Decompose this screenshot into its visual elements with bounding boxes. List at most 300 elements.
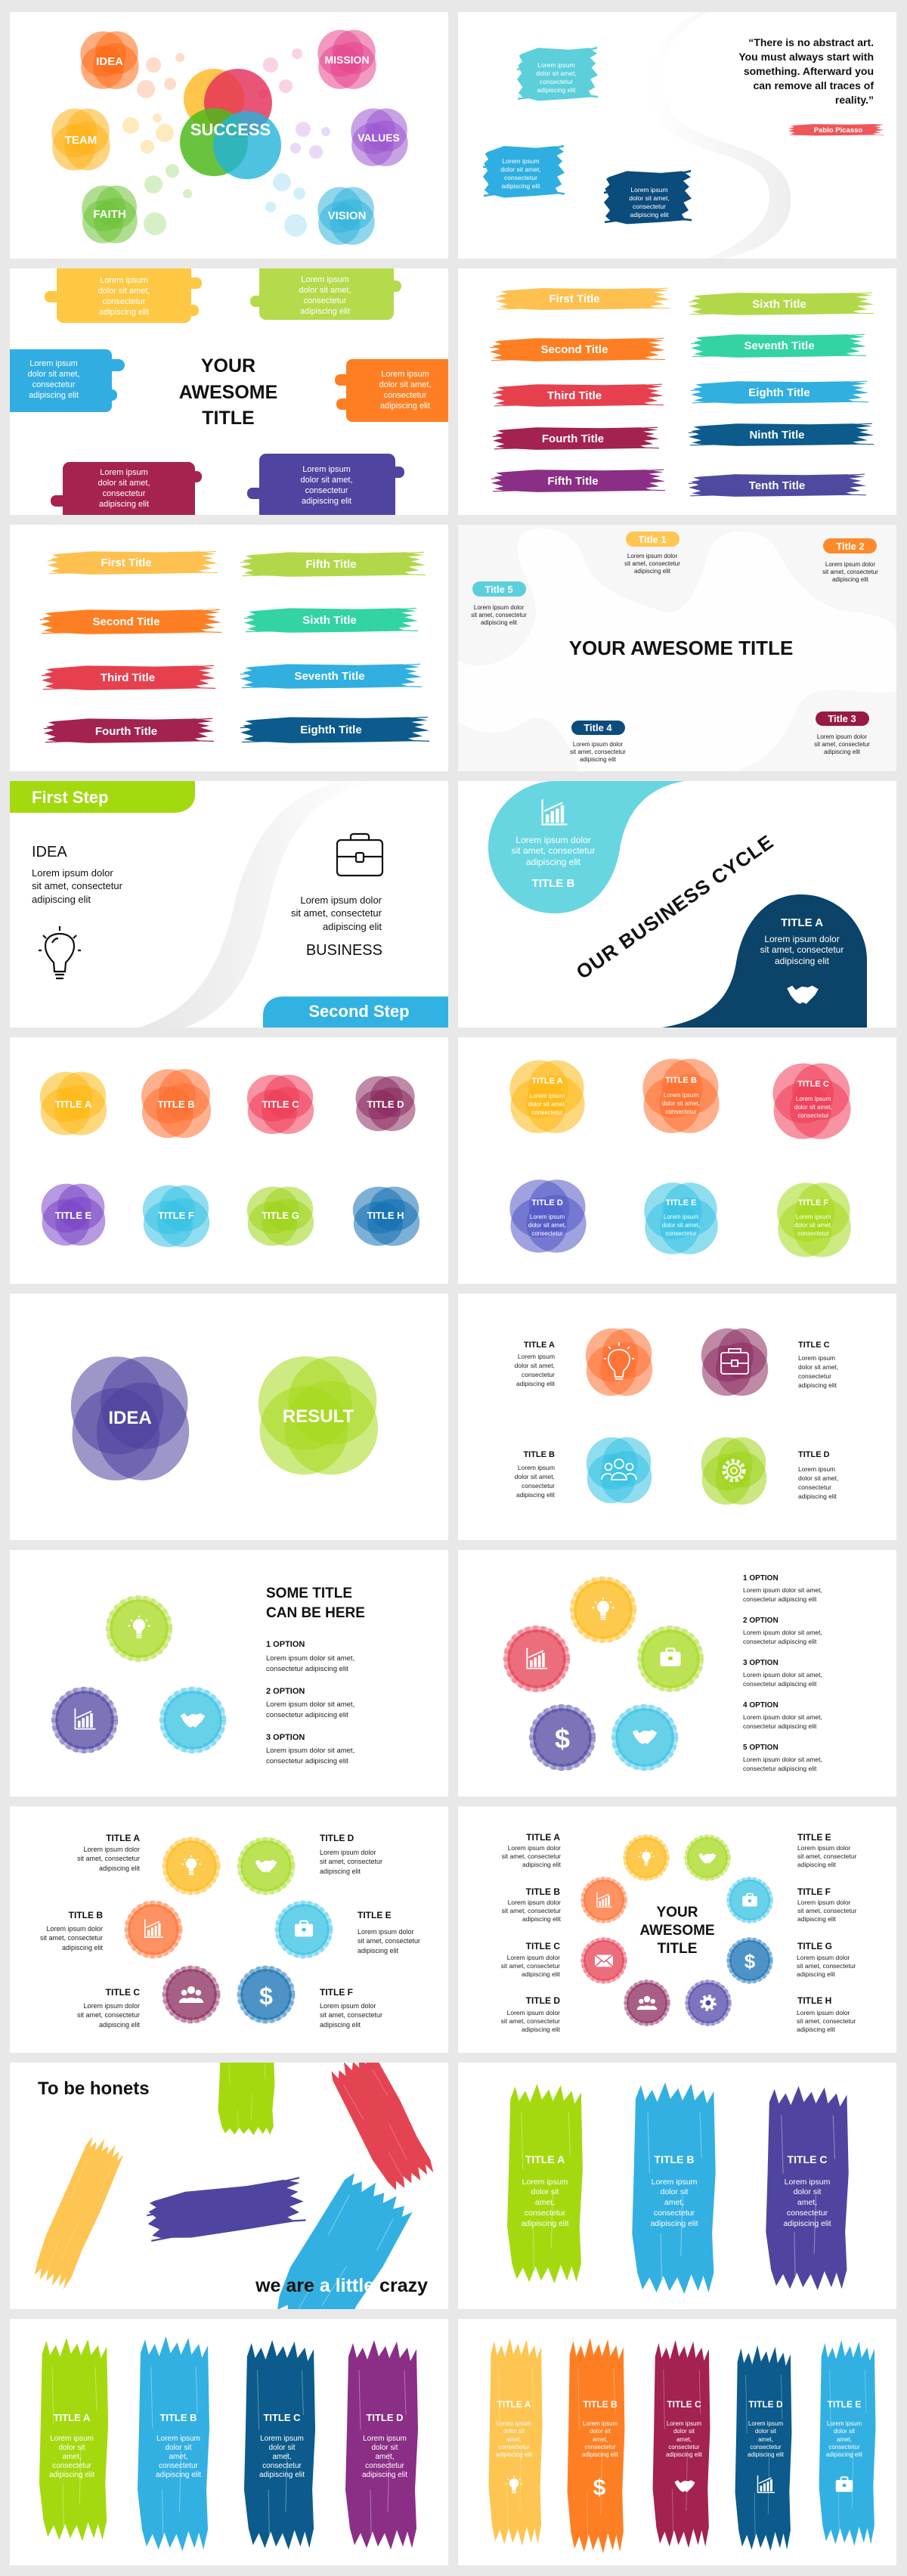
brush: Sixth Title: Sixth Title: [302, 614, 357, 627]
tag: Title 4: [570, 721, 626, 763]
TITLE B text: adipiscing elit: [62, 1944, 103, 1951]
options list: consectetur adipiscing elit: [266, 1757, 348, 1765]
badge blue dollar: [729, 1939, 771, 1982]
blob cyan people: [587, 1437, 652, 1503]
left titles A-D: TITLE D: [526, 1995, 560, 2006]
brush TITLE D: TITLE D: [748, 2399, 783, 2410]
TITLE E text: [358, 1910, 420, 1954]
green box: Lorem ipsum: [301, 275, 349, 284]
brush: Third Title: Third Title: [547, 389, 602, 402]
blob TITLE E: TITLE E: [666, 1198, 696, 1207]
green box: [250, 261, 401, 320]
TITLE B text: dolor sit amet,: [515, 1473, 555, 1480]
TITLE B text: adipiscing elit: [516, 1491, 556, 1499]
brush: Fifth Title: [240, 552, 426, 577]
blue brush box: adipiscing elit: [501, 182, 540, 190]
blob TITLE D: [355, 1076, 416, 1131]
brush TITLE D: adipiscing elit: [748, 2451, 785, 2458]
brush TITLE E: consectetur: [828, 2444, 860, 2450]
brush TITLE B: adipiscing elit: [156, 2471, 201, 2479]
tag: Title 5: sit amet, consectetur: [471, 612, 527, 618]
blob: MISSION: [317, 29, 376, 89]
TITLE B text: [40, 1910, 103, 1951]
business text block: adipiscing elit: [323, 921, 382, 932]
TITLE C text: [798, 1341, 838, 1389]
blob: IDEA: [80, 31, 139, 89]
cyan brush box: consectetur: [540, 78, 573, 85]
brush TITLE C: TITLE C: [263, 2412, 301, 2423]
blob green gear: [701, 1437, 766, 1505]
options list: 3 OPTION: [743, 1659, 779, 1667]
blob RESULT: RESULT: [283, 1406, 354, 1427]
brush TITLE B: dolor sit: [165, 2444, 192, 2452]
maroon box: consectetur: [103, 489, 146, 498]
tag: Title 1: Lorem ipsum dolor: [627, 553, 677, 560]
options list: [743, 1574, 822, 1772]
brush TITLE C: consectetur: [787, 2209, 828, 2218]
IDEA text block: [32, 844, 123, 905]
brush TITLE D: amet,: [375, 2453, 395, 2461]
IDEA text block: IDEA: [32, 844, 67, 860]
yellow box: adipiscing elit: [99, 308, 149, 317]
brush TITLE A: adipiscing elit: [496, 2451, 533, 2458]
TITLE E text: TITLE E: [358, 1910, 392, 1920]
slide 19: four vertical brushes: [10, 2319, 448, 2565]
options list: Lorem ipsum dolor sit amet,: [266, 1654, 354, 1663]
TITLE A text: Lorem ipsum: [518, 1353, 555, 1360]
brush TITLE C: adipiscing elit: [259, 2471, 305, 2479]
brush TITLE A: [39, 2338, 108, 2541]
TITLE F text: [320, 1987, 382, 2029]
right titles E-H: TITLE G: [797, 1941, 832, 1951]
brush TITLE A: dolor sit: [503, 2428, 525, 2435]
brush: Ninth Title: [689, 423, 874, 446]
cyan brush box: [517, 48, 598, 101]
TITLE D text: [320, 1833, 382, 1875]
brush TITLE A: consectetur: [52, 2462, 92, 2470]
tag: Title 3: sit amet, consectetur: [814, 741, 870, 748]
slide 9: eight blobs: [10, 1037, 448, 1284]
badge green bulb: [109, 1598, 169, 1659]
tag: Title 5: [471, 581, 527, 626]
slide 6: your awesome title with five tags: [458, 525, 896, 771]
brush: Seventh Title: [691, 334, 866, 358]
yellow box: Lorem ipsum: [100, 276, 148, 285]
TITLE A text: sit amet, consectetur: [77, 1855, 140, 1862]
brush TITLE C: dolor sit: [794, 2187, 821, 2196]
quote text: “There is no abstract art.: [748, 36, 874, 48]
options list: 1 OPTION: [743, 1574, 779, 1582]
blob TITLE E: [644, 1183, 718, 1254]
blob TITLE D: Lorem ipsum: [530, 1214, 565, 1220]
TITLE C text: consectetur: [798, 1372, 831, 1380]
brush TITLE A: amet,: [535, 2198, 555, 2207]
slide 16: eight badges around title: [458, 1806, 896, 2053]
blob TITLE F: TITLE F: [798, 1198, 828, 1207]
badge cyan briefcase: [278, 1904, 330, 1955]
heading: [266, 1586, 365, 1621]
quote text: You must always start with: [738, 51, 874, 63]
tag: Title 2: Lorem ipsum dolor: [825, 561, 875, 568]
tagline: we are a little crazy: [255, 2275, 428, 2296]
brush TITLE A: Lorem ipsum: [522, 2178, 568, 2187]
green box: consectetur: [304, 296, 347, 305]
cyan shape: title B: Lorem ipsum dolor: [515, 835, 591, 845]
tag: Title 1: [624, 532, 680, 575]
purple box: adipiscing elit: [302, 497, 351, 506]
brush: Second Title: Second Title: [93, 615, 159, 628]
left titles A-D: adipiscing elit: [522, 1861, 562, 1868]
brush: Sixth Title: Sixth Title: [752, 298, 806, 311]
slide 3: Your awesome title with boxes: [10, 268, 448, 515]
brush TITLE C: consectetur: [262, 2462, 302, 2470]
slide 20: five vertical brushes with icons: [458, 2319, 896, 2565]
brush TITLE C: TITLE C: [788, 2153, 827, 2165]
brush TITLE B: consectetur: [159, 2462, 199, 2470]
brush TITLE B: amet,: [169, 2453, 188, 2461]
IDEA text block: Lorem ipsum dolor: [32, 867, 113, 879]
brush TITLE C: amet,: [676, 2436, 692, 2443]
TITLE C text: sit amet, consectetur: [77, 2011, 140, 2019]
slide 17: to be honest, a little crazy: [10, 2063, 448, 2309]
brush TITLE D: consectetur: [365, 2462, 405, 2470]
blue box: [2, 349, 125, 412]
brush TITLE B: consectetur: [584, 2444, 616, 2450]
brush: Fourth Title: Fourth Title: [542, 432, 604, 445]
brush TITLE A: Lorem ipsum: [50, 2435, 94, 2443]
badge purple dollar: [532, 1707, 593, 1768]
orange box: adipiscing elit: [380, 401, 430, 411]
green brush: [218, 2047, 274, 2135]
quote text: [738, 36, 874, 106]
yellow brush: [29, 2133, 127, 2292]
blob TITLE G: TITLE G: [262, 1210, 299, 1221]
options list: Lorem ipsum dolor sit amet,: [266, 1700, 354, 1709]
brush TITLE B: [138, 2336, 209, 2551]
blob TITLE C: consectetur: [797, 1112, 829, 1119]
TITLE A text: TITLE A: [524, 1341, 555, 1350]
brush TITLE B: $: [593, 2475, 606, 2500]
blob TITLE D: consectetur: [531, 1230, 563, 1237]
brush TITLE D: amet,: [758, 2436, 773, 2443]
tag: Title 1: sit amet, consectetur: [624, 560, 680, 567]
TITLE C text: Lorem ipsum dolor: [83, 2002, 140, 2010]
TITLE C text: [77, 1987, 140, 2029]
brush TITLE D: [735, 2345, 791, 2551]
brush TITLE C: adipiscing elit: [783, 2219, 831, 2228]
brush TITLE C: [766, 2086, 849, 2290]
brush: Third Title: [42, 665, 215, 690]
options list: consectetur adipiscing elit: [743, 1680, 817, 1688]
tag: Title 1: Title 1: [638, 534, 667, 545]
brush: Fourth Title: [44, 718, 214, 743]
blob TITLE D: [509, 1180, 587, 1253]
TITLE B text: TITLE B: [523, 1450, 555, 1459]
TITLE A text: TITLE A: [106, 1833, 140, 1843]
brush TITLE B: amet,: [593, 2436, 608, 2443]
blue box: dolor sit amet,: [27, 370, 80, 379]
navy shape: title A: TITLE A: [781, 916, 823, 929]
brush: Third Title: Third Title: [101, 671, 155, 684]
blob IDEA: [71, 1356, 189, 1480]
main title: AWESOME: [179, 382, 277, 403]
blue box: Lorem ipsum: [29, 359, 78, 368]
options list: Lorem ipsum dolor sit amet,: [743, 1629, 822, 1636]
TITLE A text: dolor sit amet,: [515, 1362, 555, 1369]
yellow box: dolor sit amet,: [98, 287, 150, 296]
TITLE A text: adipiscing elit: [516, 1380, 556, 1387]
slide 8: our business cycle: [458, 781, 896, 1028]
business text block: [291, 894, 382, 959]
blob: FAITH: FAITH: [93, 208, 126, 221]
right titles E-H: sit amet, consectetur: [797, 1907, 857, 1914]
slide 1: success bubbles: [10, 12, 448, 259]
blob TITLE A: consectetur: [531, 1109, 563, 1116]
TITLE C text: TITLE C: [106, 1987, 140, 1998]
left titles A-D: Lorem ipsum dolor: [507, 2009, 560, 2016]
center title: AWESOME: [639, 1923, 715, 1939]
brush TITLE A: Lorem ipsum: [497, 2420, 531, 2427]
right titles E-H: adipiscing elit: [797, 1861, 837, 1868]
blob: IDEA: IDEA: [96, 55, 123, 68]
rotated title: OUR BUSINESS CYCLE: [572, 830, 778, 984]
TITLE C text: Lorem ipsum: [798, 1354, 835, 1362]
maroon box: Lorem ipsum: [100, 468, 148, 477]
options list: 5 OPTION: [743, 1744, 779, 1752]
slide 10: six blobs with text: [458, 1037, 896, 1284]
blue brush box: consectetur: [504, 174, 537, 181]
badge purple dollar: $: [555, 1723, 570, 1754]
brush: Fifth Title: Fifth Title: [547, 475, 599, 488]
purple box: dolor sit amet,: [300, 476, 353, 485]
navy shape: title A: Lorem ipsum dolor: [764, 934, 840, 944]
brush TITLE C: Lorem ipsum: [260, 2435, 304, 2443]
TITLE D text: dolor sit amet,: [798, 1474, 838, 1482]
left titles A-D: adipiscing elit: [522, 1915, 562, 1923]
TITLE B text: sit amet, consectetur: [40, 1934, 103, 1942]
brush TITLE D: Lorem ipsum: [748, 2420, 783, 2427]
brush TITLE A: TITLE A: [525, 2153, 565, 2165]
options list: Lorem ipsum dolor sit amet,: [266, 1747, 354, 1755]
brush TITLE A: adipiscing elit: [521, 2219, 569, 2228]
tag: Title 2: sit amet, consectetur: [822, 569, 878, 575]
right titles E-H: Lorem ipsum dolor: [797, 1954, 850, 1961]
TITLE D text: TITLE D: [320, 1833, 354, 1843]
navy brush box: Lorem ipsum: [630, 186, 668, 194]
tag: Title 4: Lorem ipsum dolor: [573, 741, 623, 748]
TITLE B text: TITLE B: [69, 1910, 103, 1920]
left titles A-D: sit amet, consectetur: [501, 1962, 560, 1970]
brush TITLE E: dolor sit: [834, 2428, 856, 2435]
author brush label: [788, 124, 884, 135]
brush: Fifth Title: [491, 470, 665, 492]
brush TITLE A: [488, 2338, 543, 2546]
brush: Eighth Title: Eighth Title: [748, 386, 810, 399]
badge purple chart: [54, 1690, 115, 1750]
blob TITLE A: TITLE A: [531, 1077, 563, 1086]
badge blue dollar: [240, 1969, 292, 2020]
right titles E-H: sit amet, consectetur: [797, 2017, 856, 2025]
blob TITLE F: consectetur: [797, 1230, 829, 1237]
left titles A-D: Lorem ipsum dolor: [508, 1899, 561, 1906]
tag: Title 3: adipiscing elit: [824, 749, 861, 755]
blob TITLE C: Lorem ipsum: [796, 1096, 831, 1102]
tag: Title 5: Title 5: [484, 584, 513, 595]
purple box: consectetur: [305, 486, 348, 495]
tag: Title 3: Title 3: [828, 713, 856, 724]
options list: consectetur adipiscing elit: [743, 1595, 817, 1603]
options list: consectetur adipiscing elit: [743, 1722, 817, 1730]
Second Step bar: Second Step: [308, 1002, 410, 1021]
blue box: adipiscing elit: [29, 391, 79, 400]
blue box: consectetur: [33, 380, 76, 389]
business text block: BUSINESS: [306, 942, 382, 959]
tag: Title 5: adipiscing elit: [481, 619, 518, 626]
tag: Title 3: Lorem ipsum dolor: [817, 733, 867, 740]
brush TITLE C: Lorem ipsum: [667, 2420, 701, 2427]
blob RESULT: [258, 1356, 378, 1474]
brush TITLE B: adipiscing elit: [650, 2219, 698, 2228]
right titles E-H: TITLE F: [797, 1886, 831, 1897]
brush TITLE A: amet,: [506, 2436, 522, 2443]
brush TITLE B: Lorem ipsum: [652, 2178, 698, 2187]
options list: consectetur adipiscing elit: [266, 1665, 348, 1673]
cyan shape: title B: sit amet, consectetur: [512, 845, 595, 856]
brush: First Title: [496, 288, 670, 310]
right titles E-H: sit amet, consectetur: [797, 1852, 857, 1860]
badge maroon people: [626, 1982, 668, 2024]
orange box: dolor sit amet,: [379, 380, 432, 389]
badge red chart: [506, 1629, 567, 1689]
blob: TEAM: [51, 109, 110, 171]
First Step bar: [10, 781, 195, 813]
brush: Seventh Title: [240, 664, 422, 689]
brush TITLE D: Lorem ipsum: [363, 2435, 407, 2443]
TITLE E text: Lorem ipsum dolor: [358, 1928, 414, 1936]
maroon box: dolor sit amet,: [98, 479, 150, 488]
right titles E-H: adipiscing elit: [797, 1915, 837, 1923]
icon: briefcase: [337, 834, 382, 876]
navy shape: title A: adipiscing elit: [775, 956, 830, 966]
brush: Eighth Title: Eighth Title: [300, 724, 362, 736]
purple box: Lorem ipsum: [302, 465, 351, 474]
author brush label: Pablo Picasso: [814, 126, 862, 135]
IDEA text block: adipiscing elit: [32, 894, 91, 905]
options list: Lorem ipsum dolor sit amet,: [743, 1586, 822, 1594]
TITLE E text: adipiscing elit: [358, 1947, 399, 1954]
brush TITLE E: amet,: [837, 2436, 852, 2443]
decorative bubbles: [122, 48, 330, 237]
options list: 2 OPTION: [743, 1617, 779, 1625]
badge blue dollar: $: [744, 1950, 756, 1973]
blob TITLE A: [509, 1060, 585, 1133]
badge purple gear: [687, 1982, 729, 2024]
brush TITLE D: dolor sit: [371, 2444, 398, 2452]
blob: VISION: [317, 187, 375, 245]
options list: Lorem ipsum dolor sit amet,: [743, 1756, 822, 1763]
brush TITLE A: dolor sit: [58, 2444, 85, 2452]
TITLE F text: sit amet, consectetur: [320, 2011, 382, 2019]
blob TITLE C: [247, 1074, 314, 1134]
blob TITLE B: TITLE B: [157, 1099, 195, 1110]
TITLE D text: sit amet, consectetur: [320, 1858, 382, 1865]
tag: Title 1: adipiscing elit: [634, 568, 671, 575]
brush TITLE A: consectetur: [498, 2444, 530, 2450]
blob TITLE D: dolor sit amet,: [528, 1222, 566, 1229]
blob TITLE A: dolor sit amet,: [528, 1101, 566, 1108]
slide 18: three vertical brushes: [458, 2063, 896, 2309]
business text block: sit amet, consectetur: [291, 907, 382, 919]
quote text: can remove all traces of: [753, 79, 874, 91]
TITLE A text: consectetur: [522, 1371, 555, 1378]
brush: Tenth Title: [689, 474, 866, 497]
brush: Seventh Title: Seventh Title: [744, 339, 815, 352]
brush: First Title: First Title: [101, 556, 152, 569]
options list: Lorem ipsum dolor sit amet,: [743, 1713, 822, 1721]
blob TITLE B: [642, 1059, 720, 1133]
left titles A-D: TITLE C: [526, 1941, 560, 1951]
slide 13: three badges with options: [10, 1550, 448, 1796]
brush: Sixth Title: [244, 608, 418, 633]
right titles E-H: sit amet, consectetur: [797, 1962, 856, 1970]
tag: Title 4: sit amet, consectetur: [570, 749, 626, 755]
left titles A-D: Lorem ipsum dolor: [507, 1954, 560, 1961]
right titles E-H: Lorem ipsum dolor: [797, 1899, 851, 1906]
brush: Tenth Title: Tenth Title: [749, 479, 805, 492]
navy brush box: consectetur: [633, 203, 666, 210]
brush TITLE B: TITLE B: [655, 2153, 694, 2165]
blob TITLE H: [353, 1186, 419, 1246]
brush TITLE E: adipiscing elit: [826, 2451, 863, 2458]
right titles E-H: Lorem ipsum dolor: [797, 2009, 850, 2016]
brush TITLE B: dolor sit: [590, 2428, 611, 2435]
brush TITLE C: dolor sit: [268, 2444, 296, 2452]
brush: Fourth Title: [493, 427, 659, 450]
cyan brush box: dolor sit amet,: [536, 70, 577, 77]
blue brush box: [483, 146, 565, 197]
blob: TEAM: TEAM: [65, 134, 97, 147]
brush: Ninth Title: Ninth Title: [749, 429, 805, 442]
icon: light bulb: [39, 926, 81, 978]
IDEA text block: sit amet, consectetur: [32, 880, 123, 891]
brush TITLE A: dolor sit: [531, 2187, 559, 2196]
blob TITLE F: Lorem ipsum: [796, 1214, 831, 1220]
blob TITLE C: TITLE C: [797, 1080, 829, 1089]
TITLE C text: TITLE C: [798, 1341, 830, 1350]
left titles A-D: TITLE A: [526, 1832, 560, 1843]
blob TITLE B: TITLE B: [665, 1076, 697, 1085]
left titles A-D: [501, 1832, 562, 2033]
left titles A-D: sit amet, consectetur: [501, 2017, 560, 2025]
brush TITLE C: adipiscing elit: [666, 2451, 703, 2458]
blob TITLE B: [141, 1069, 211, 1138]
tag: Title 2: Title 2: [836, 541, 865, 552]
options list: 1 OPTION: [266, 1640, 305, 1649]
brush TITLE D: consectetur: [750, 2444, 782, 2450]
left titles A-D: sit amet, consectetur: [502, 1907, 561, 1914]
options list: consectetur adipiscing elit: [743, 1638, 817, 1645]
blob TITLE G: [247, 1186, 314, 1246]
brush TITLE A: adipiscing elit: [49, 2471, 94, 2479]
blob TITLE B: Lorem ipsum: [664, 1092, 698, 1099]
slide 5: eight brush titles: [10, 525, 448, 771]
left titles A-D: TITLE B: [526, 1886, 560, 1897]
right titles E-H: TITLE H: [797, 1995, 831, 2006]
blue brush: [267, 2167, 417, 2348]
brush TITLE D: adipiscing elit: [362, 2471, 407, 2479]
slide 15: six badges titles A-F: [10, 1806, 448, 2053]
heading: SOME TITLE: [266, 1586, 352, 1601]
